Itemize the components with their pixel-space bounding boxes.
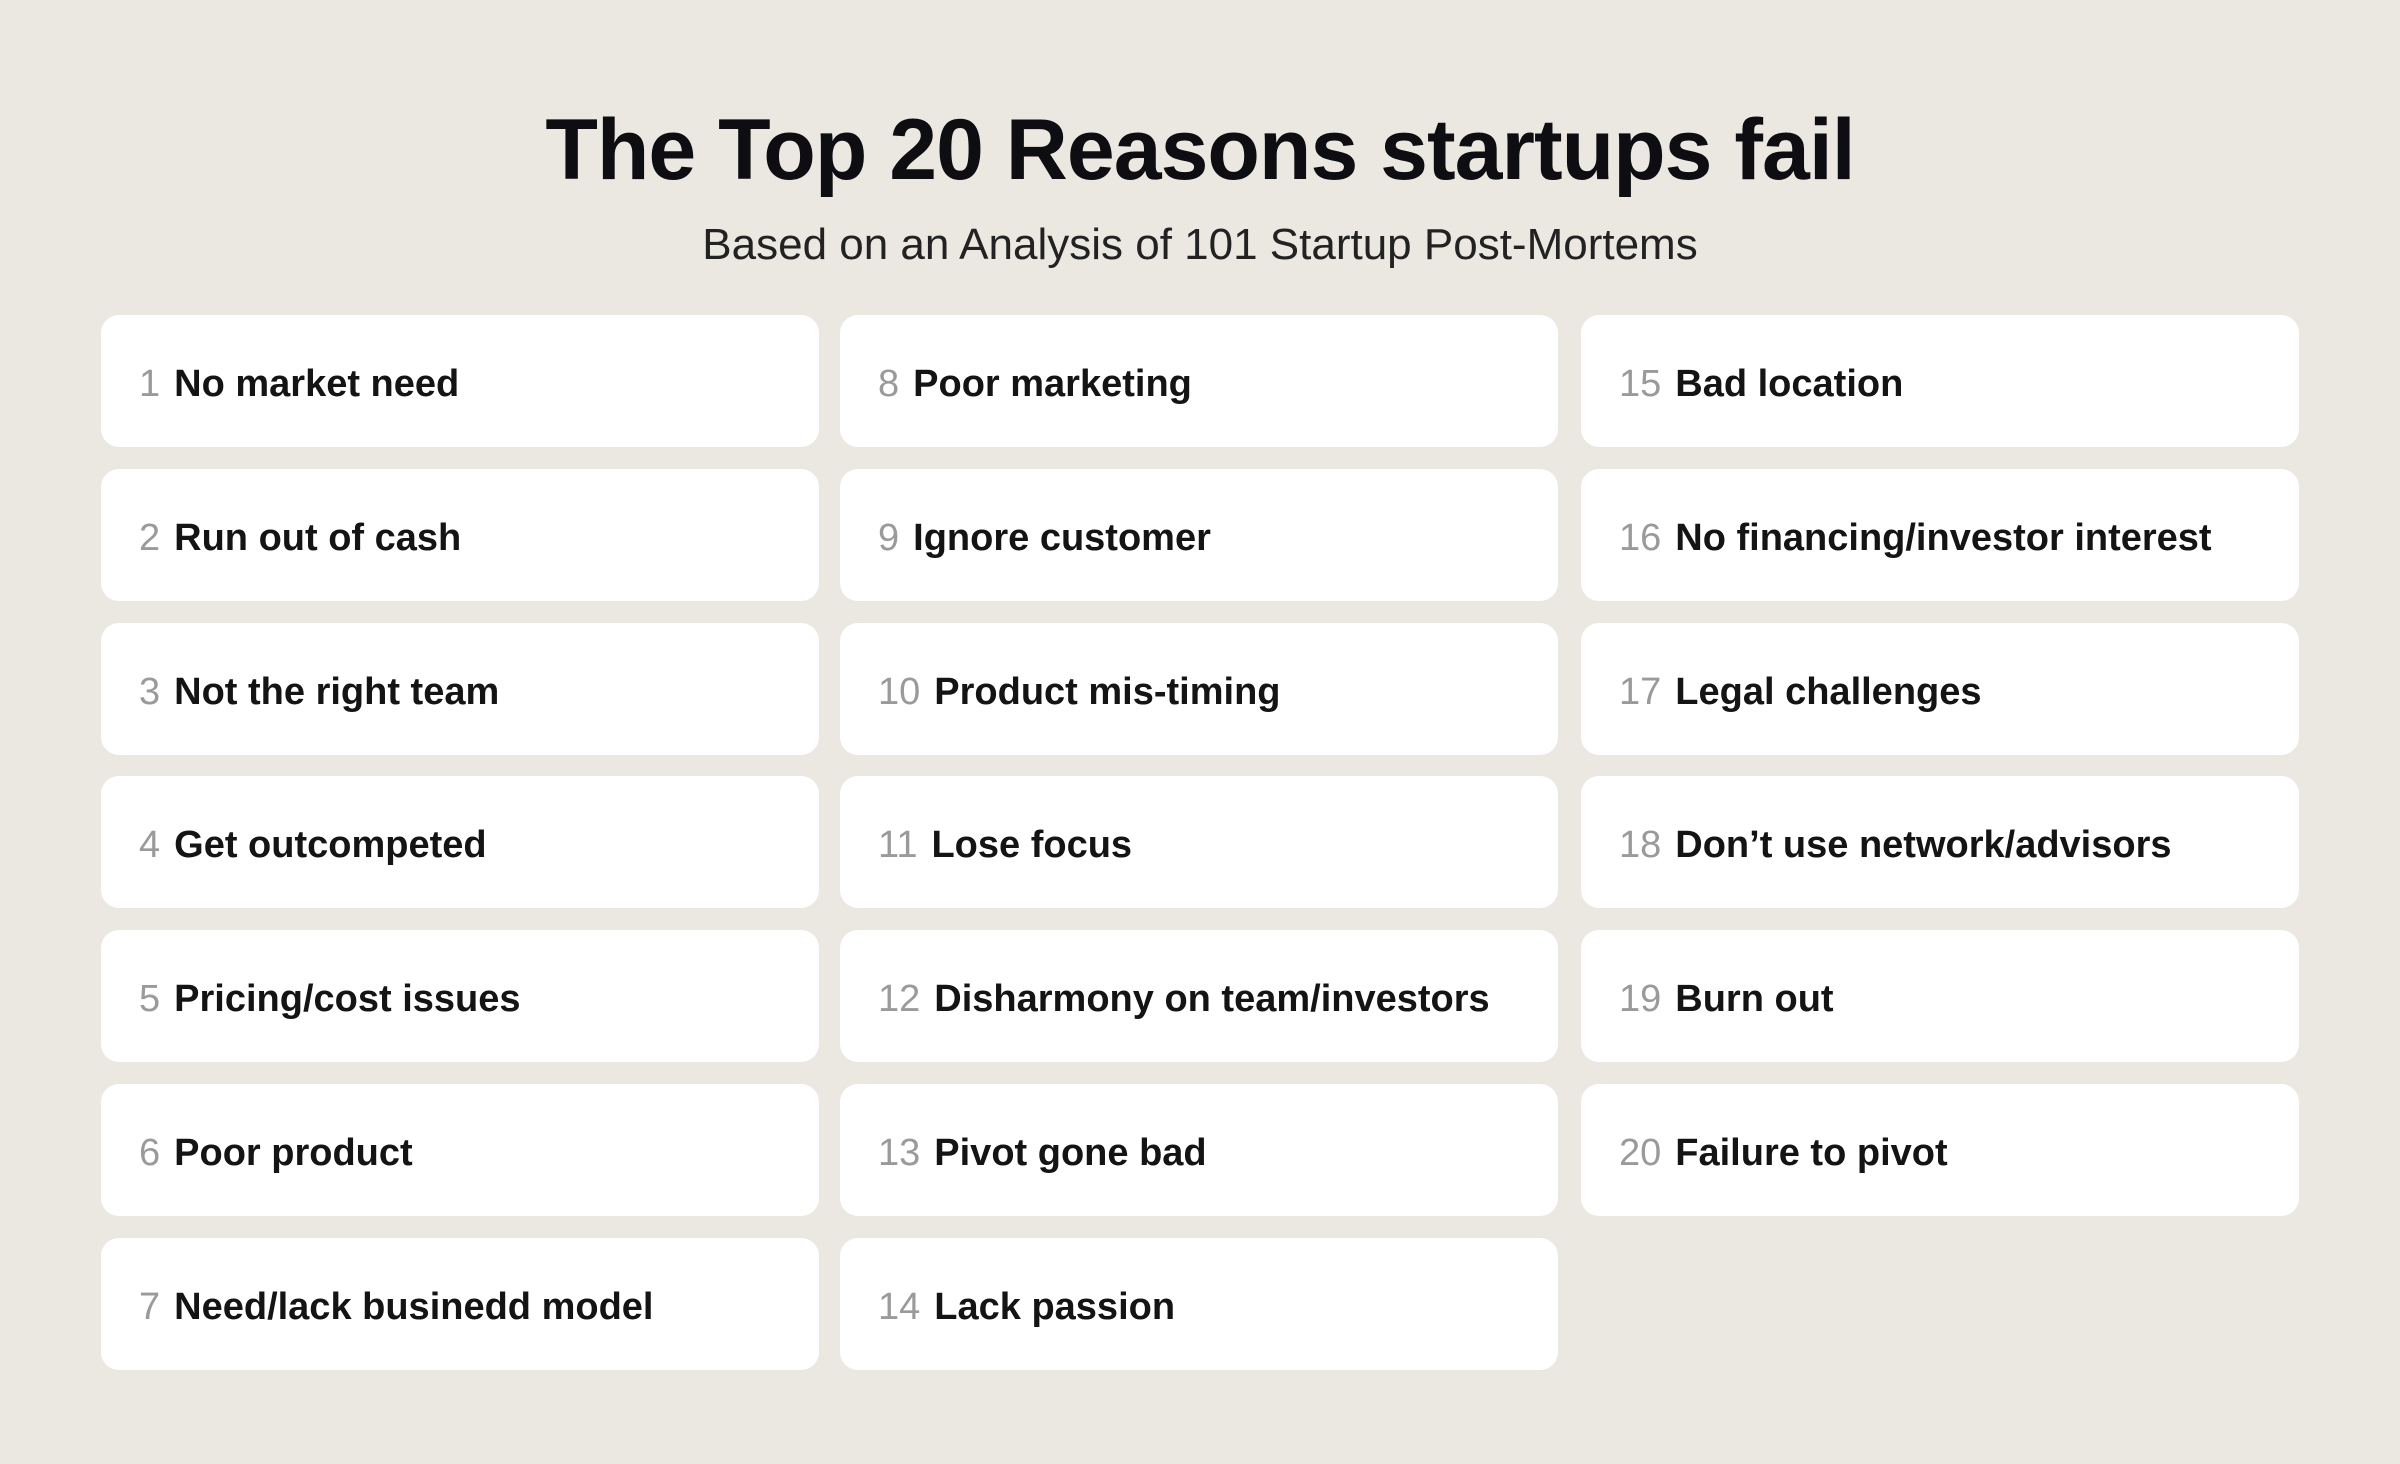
card: 18: Don’t use network/advisors (1675, 824, 2172, 866)
card: 9: Ignore customer (913, 516, 1211, 558)
card: 12 (840, 930, 1558, 1062)
card: 20: 20 (1619, 1132, 1661, 1174)
card: 6: 6 (139, 1132, 160, 1174)
card: 15 (1581, 315, 2299, 447)
card: 16 (1581, 469, 2299, 601)
card: 3: 3 (139, 670, 160, 712)
card: 7: 7 (139, 1286, 160, 1328)
card: 4 (101, 776, 819, 908)
card: 3: Not the right team (174, 670, 499, 712)
card: 19: Burn out (1675, 978, 1834, 1020)
card: 14: 14 (878, 1286, 920, 1328)
card: 11: Lose focus (931, 824, 1132, 866)
card: 13: Pivot gone bad (934, 1132, 1207, 1174)
card: 9 (840, 469, 1558, 601)
card: 6: Poor product (174, 1132, 413, 1174)
card: 16: No financing/investor interest (1675, 516, 2212, 558)
card: 17 (1581, 623, 2299, 755)
card: 10: 10 (878, 670, 920, 712)
card: 10: Product mis-timing (934, 670, 1281, 712)
card: 8: Poor marketing (913, 362, 1192, 404)
card: 7: Need/lack businedd model (174, 1286, 653, 1328)
card: 13 (840, 1084, 1558, 1216)
card: 9: 9 (878, 516, 899, 558)
card: 17: Legal challenges (1675, 670, 1982, 712)
card: 14 (840, 1238, 1558, 1370)
title: The Top 20 Reasons startups fail (545, 102, 1855, 198)
card: 2 (101, 469, 819, 601)
card: 17: 17 (1619, 670, 1661, 712)
card: 8: 8 (878, 362, 899, 404)
card: 15: 15 (1619, 362, 1661, 404)
card: 11: 11 (878, 824, 917, 866)
card: 14: Lack passion (934, 1286, 1175, 1328)
card: 16: 16 (1619, 516, 1661, 558)
card: 12: 12 (878, 978, 920, 1020)
subtitle: Based on an Analysis of 101 Startup Post-Mortems (702, 220, 1698, 269)
card: 5: 5 (139, 978, 160, 1020)
card: 13: 13 (878, 1132, 920, 1174)
card: 18: 18 (1619, 824, 1661, 866)
card: 11 (840, 776, 1558, 908)
card: 4: Get outcompeted (174, 824, 487, 866)
card: 1: No market need (174, 362, 459, 404)
card: 2: 2 (139, 516, 160, 558)
card: 4: 4 (139, 824, 160, 866)
card: 2: Run out of cash (174, 516, 461, 558)
card: 1: 1 (139, 362, 160, 404)
card: 7 (101, 1238, 819, 1370)
card: 20: Failure to pivot (1675, 1132, 1948, 1174)
card: 20 (1581, 1084, 2299, 1216)
card: 6 (101, 1084, 819, 1216)
card: 19: 19 (1619, 978, 1661, 1020)
card: 5: Pricing/cost issues (174, 978, 521, 1020)
card: 19 (1581, 930, 2299, 1062)
card: 18 (1581, 776, 2299, 908)
card: 15: Bad location (1675, 362, 1903, 404)
card: 5 (101, 930, 819, 1062)
card: 8 (840, 315, 1558, 447)
card: 12: Disharmony on team/investors (934, 978, 1490, 1020)
card: 10 (840, 623, 1558, 755)
card: 1 (101, 315, 819, 447)
card: 3 (101, 623, 819, 755)
